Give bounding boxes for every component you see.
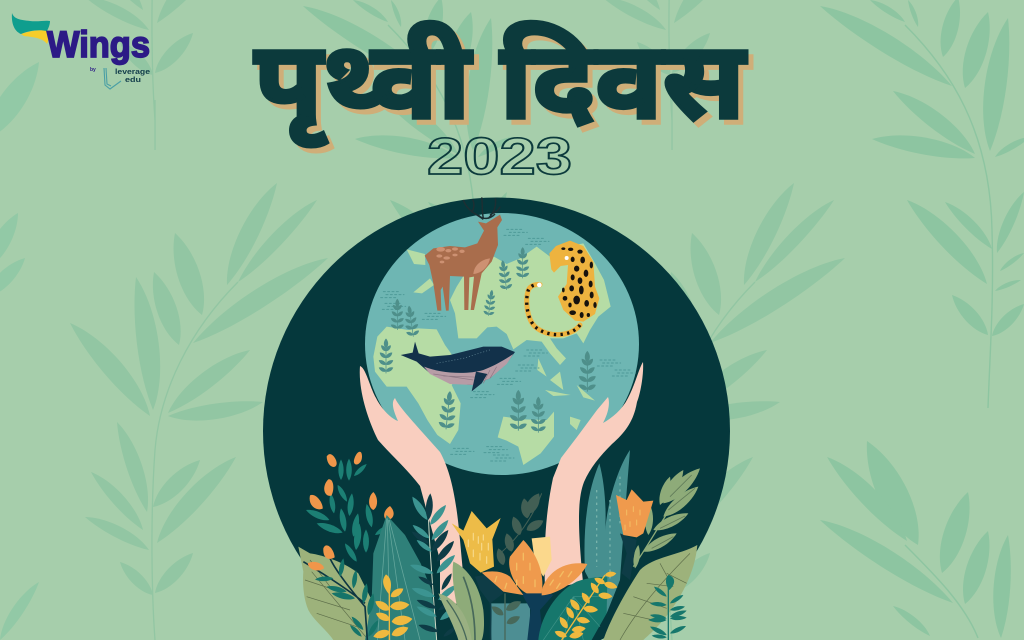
leopard [527,241,599,335]
foliage cluster [298,450,704,640]
big orange flower [482,537,587,640]
center dark sprig [495,491,545,566]
logo: Wings by leverage edu [12,13,150,89]
title shadow: पृथ्वी दिवस [259,26,752,168]
icon: wing swoosh [12,13,50,44]
hands [360,362,643,606]
by label: by [90,67,96,73]
leverage edu label: leverage [115,67,150,76]
yellow branch [554,571,618,640]
globe ocean [365,213,639,475]
icon: leverage V mark [104,68,121,89]
left berries and stems [305,452,394,563]
right green big leaf [538,577,607,640]
tall teal leaves right [584,450,630,613]
deer [425,197,502,311]
small orange tulip [616,489,653,580]
yellow tulip [452,511,501,573]
teal central block [490,603,530,640]
center fern [409,493,462,640]
right dark green fern [648,575,687,640]
dark circle backdrop [263,198,730,640]
whale [401,342,515,391]
continents [373,243,611,465]
globe plants [378,247,597,433]
title [254,21,752,168]
deer spots [436,247,490,274]
globe illustration [365,197,639,475]
ocean dashes [381,229,636,461]
right olive sprigs [632,464,704,569]
edu label: edu [125,75,141,84]
title text: पृथ्वी दिवस [254,21,747,163]
olive leaf right [603,545,697,640]
left dark sprig with orange buds [303,545,380,640]
olive leaf left [298,547,375,640]
olive center leaves [438,562,484,640]
left yellow sprig [372,574,413,640]
dark leaves under center [475,573,523,640]
dark teal fan leaf [365,515,437,640]
wordmark: Wings [47,24,150,65]
year 2023 outlined: 2023 [427,128,572,186]
left hand [360,366,466,606]
right hand [545,362,643,590]
